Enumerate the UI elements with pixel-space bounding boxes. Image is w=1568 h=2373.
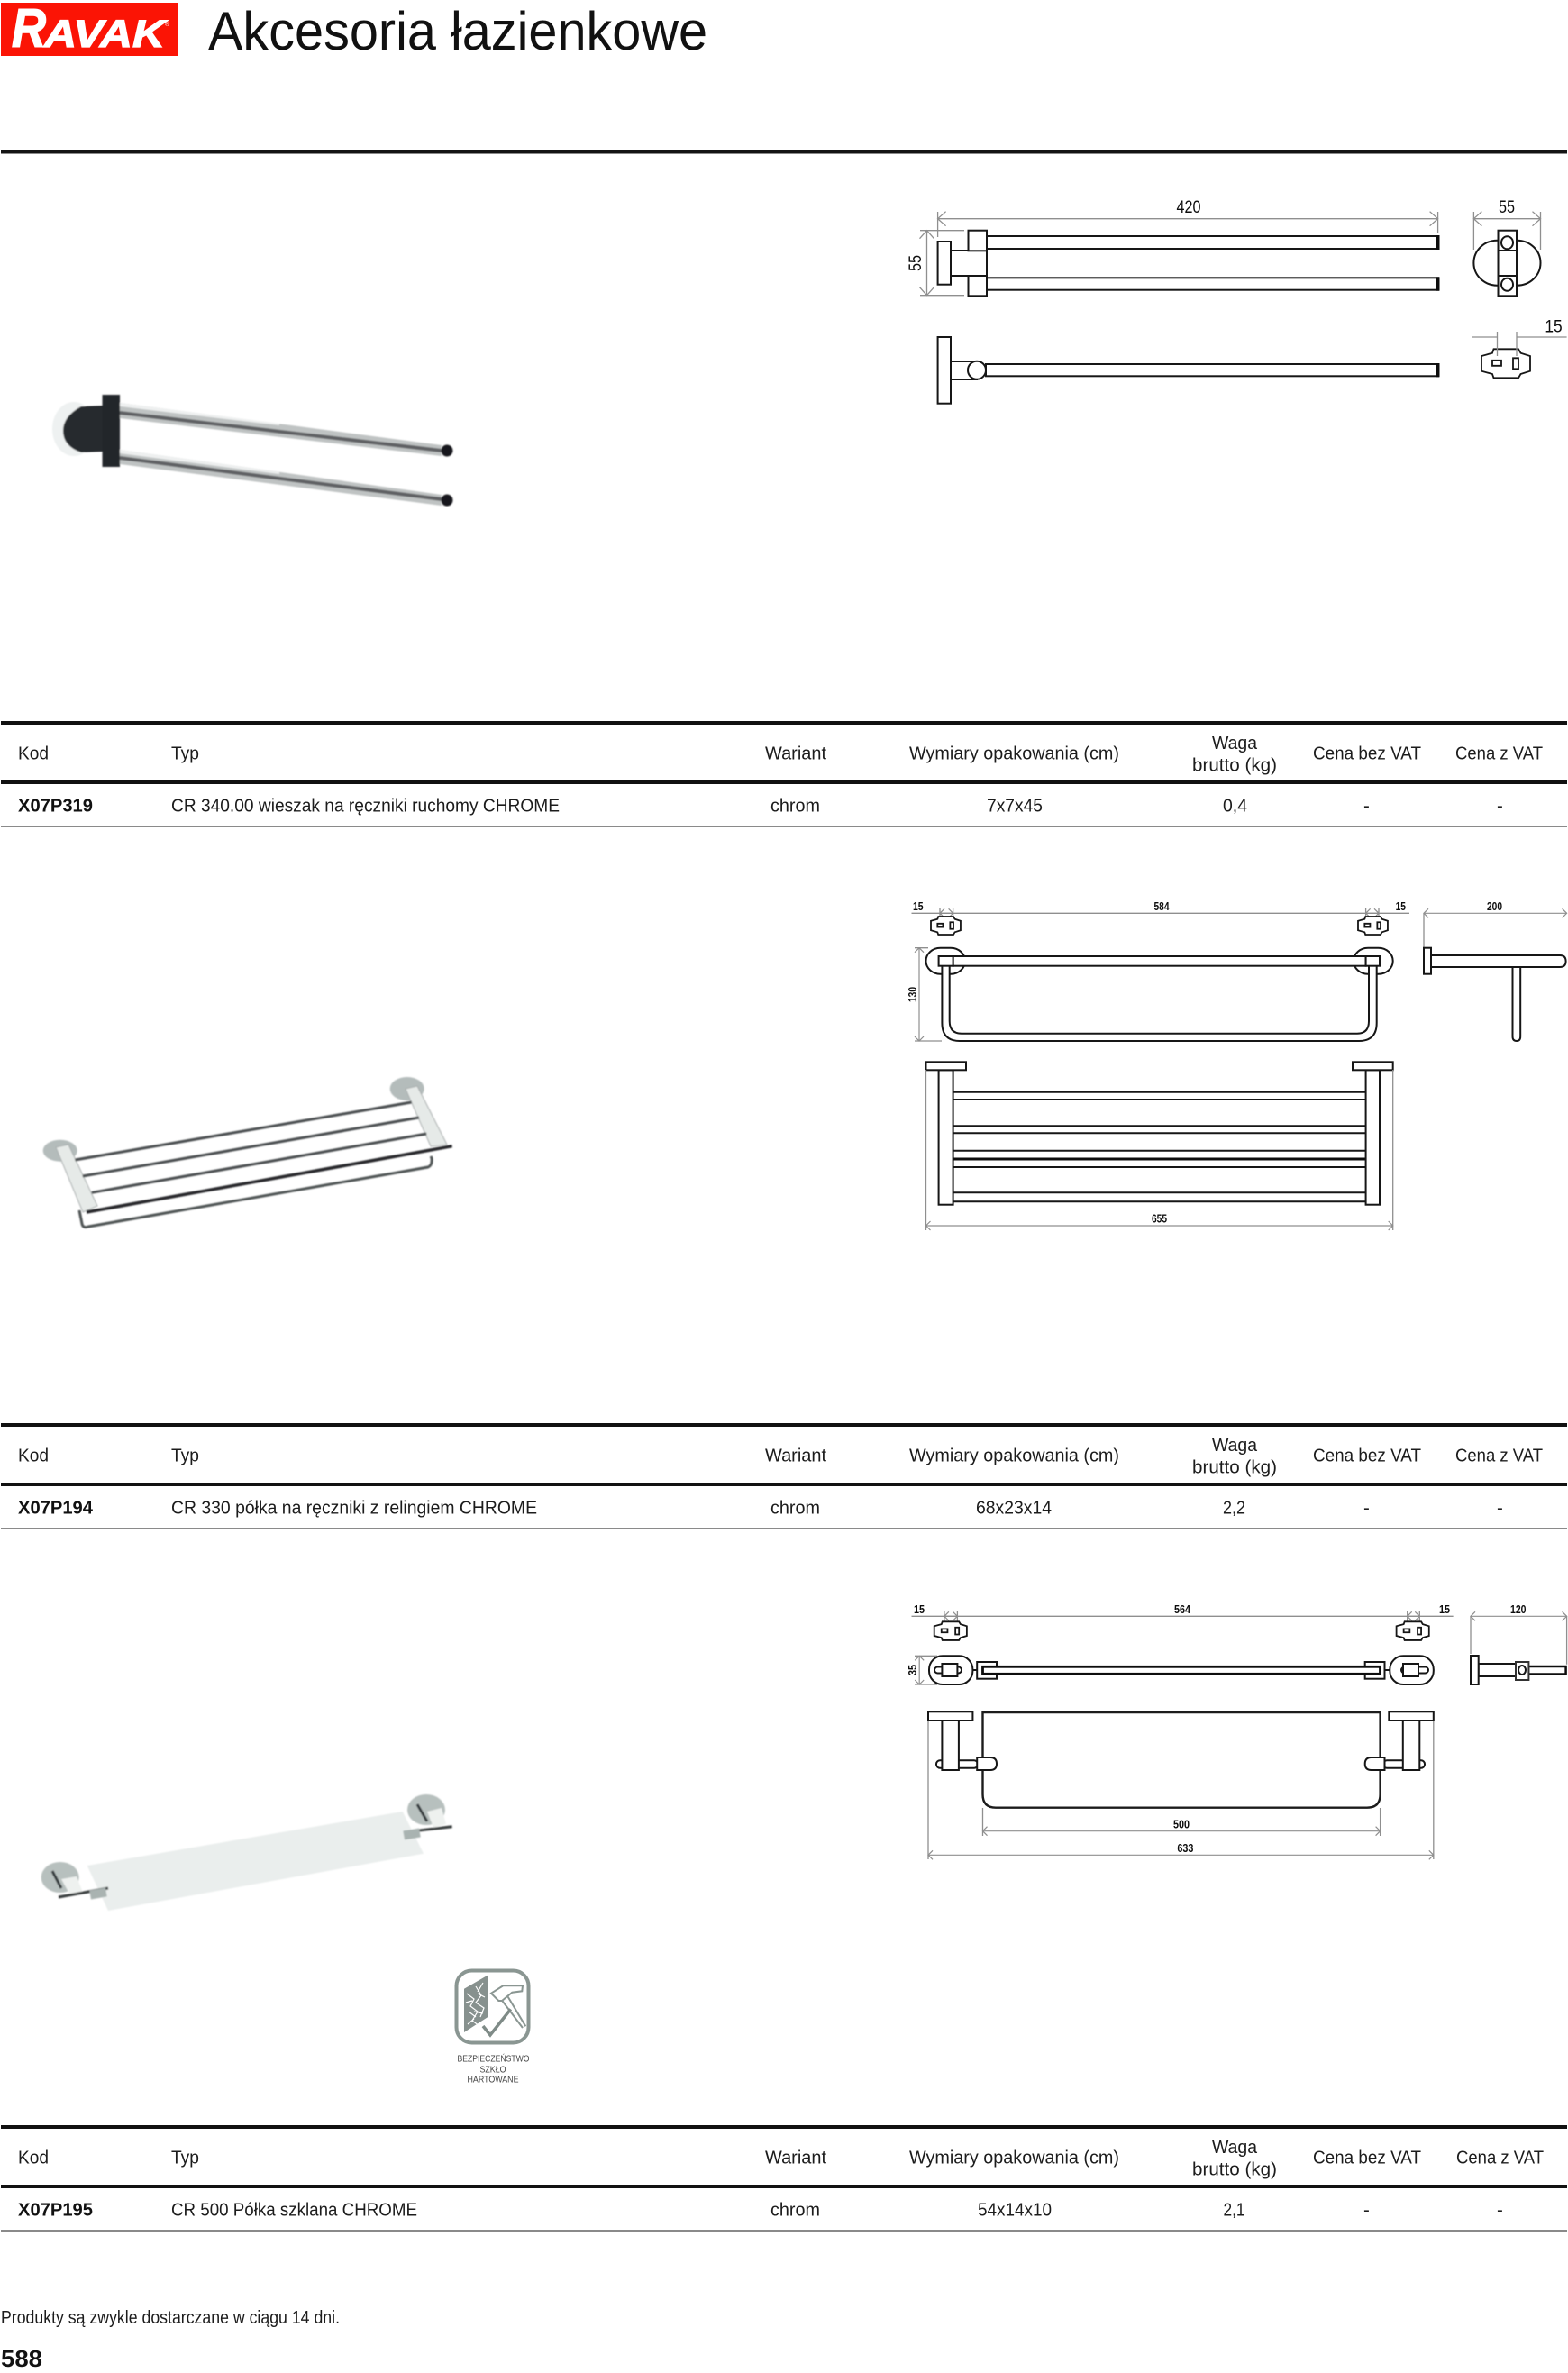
page number: 588 [1,2345,42,2372]
side view shelf [1424,948,1566,1041]
table: X07P195: Cena z VAT [1456,2147,1544,2168]
photo: towel rail X07P319 [52,395,452,507]
title: Akcesoria łazienkowe [208,1,707,61]
dimension: 55 horizontal: 55 [1499,198,1515,217]
footnote: Produkty są zwykle dostarczane w ciągu 14 dni. [1,2307,340,2328]
table: X07P319: Wymiary opakowania (cm) [909,743,1119,764]
table: X07P319: Cena bez VAT [1313,743,1421,764]
dimension: 55 vertical [907,231,964,296]
table: X07P194: Kod [18,1446,49,1465]
dimension: 633 [928,1721,1434,1859]
table: X07P194: X07P194 [18,1498,94,1518]
table: X07P319: CR 340.00 wieszak na ręczniki ruchomy CHROME [171,795,560,817]
table: X07P194: - [1363,1498,1370,1518]
table: X07P319: Cena z VAT [1455,743,1543,764]
table: X07P195: Wariant [765,2147,826,2168]
logo: RAVAK [1,0,178,59]
photo: glass shelf X07P195 [41,1794,452,1911]
table: X07P319: Kod [18,743,49,764]
dimension: 500: 500 [1173,1817,1190,1830]
logo: RAVAK: R [12,0,46,59]
dimension: 55 vertical: 55 [907,255,925,271]
icon part: hammer [491,1985,525,2028]
table: X07P319 [1,721,1567,827]
table: X07P195: X07P195 [18,2199,93,2221]
dimension: 500 [982,1808,1381,1836]
dimension: 35 [906,1656,937,1684]
table: X07P194: Cena bez VAT [1313,1446,1421,1465]
table: X07P195: Wymiary opakowania (cm) [909,2147,1119,2168]
table: X07P319: 0,4 [1223,795,1247,817]
table: X07P194: 2,2 [1223,1498,1245,1518]
dimension: 420: 420 [1177,198,1200,217]
wall plate front [1473,231,1541,296]
table: X07P319: Waga [1212,733,1258,753]
table: X07P195: Typ [171,2147,199,2168]
icon caption: SZKŁO [479,2065,506,2075]
dimension: 130 [906,948,942,1041]
icon part: check mark [483,2009,511,2035]
table: X07P194: - [1497,1498,1503,1518]
table: X07P195: Waga [1212,2137,1258,2158]
wall plates [934,1621,1429,1640]
dimension: 633: 633 [1177,1841,1193,1855]
wall plate with holes [1472,317,1567,378]
icon: tempered safety glass [456,1970,528,2042]
dimension row top: 15 [914,1602,925,1616]
icon caption: HARTOWANE [467,2076,519,2086]
table: X07P195: chrom [770,2199,820,2221]
dimension row top: 15 [1439,1602,1450,1616]
dimension: 655 [926,1070,1393,1230]
dimension row top [912,1602,1454,1624]
header rule [1,150,1567,153]
table: X07P194: CR 330 półka na ręczniki z relingiem CHROME [171,1498,537,1518]
dimension: 130: 130 [906,987,919,1002]
icon caption [458,2054,530,2086]
technical drawing: towel rail [907,198,1567,404]
table: X07P194: brutto (kg) [1192,1456,1277,1478]
table: X07P194: Wariant [765,1446,826,1465]
table: X07P319: X07P319 [18,795,93,817]
dimension: 120 [1471,1602,1567,1665]
top view shelf [926,1062,1393,1205]
table: X07P195: brutto (kg) [1192,2159,1277,2179]
dimension row top [912,899,1409,919]
table: X07P319: - [1497,795,1503,817]
table: X07P319: brutto (kg) [1192,755,1277,775]
table: X07P194 [1,1423,1567,1529]
technical drawing: shelf with rail [906,899,1567,1230]
table: X07P194: Waga [1212,1435,1258,1456]
table: X07P319: - [1363,795,1370,817]
table: X07P195: Cena bez VAT [1313,2147,1421,2168]
dimension row top: 15 [1396,899,1406,913]
table: X07P195: CR 500 Półka szklana CHROME [171,2199,417,2221]
dimension row top: 15 [913,899,924,913]
top view rail [938,231,1440,296]
table: X07P195: - [1363,2199,1370,2221]
dimension row top: 584 [1153,899,1170,913]
table: X07P194: 68x23x14 [976,1498,1052,1518]
dimension: 120: 120 [1510,1602,1527,1616]
dimension: 55 horizontal [1473,198,1541,250]
table: X07P194: chrom [770,1498,820,1518]
top view shelf [929,1656,1434,1684]
logo: RAVAK: ® [165,21,170,28]
table: X07P319: chrom [770,795,820,817]
front view shelf [926,948,1393,1041]
side view shelf [1471,1656,1566,1684]
dimension: 655: 655 [1152,1212,1167,1226]
table: X07P319: Wariant [765,743,826,764]
table: X07P195: 54x14x10 [978,2199,1052,2221]
wall plate with holes: 15 [1545,317,1563,336]
photo: shelf with rail X07P194 [43,1077,452,1228]
table: X07P194: Typ [171,1446,199,1465]
table: X07P195 [1,2125,1567,2232]
table: X07P195: Kod [18,2147,49,2168]
table: X07P194: Wymiary opakowania (cm) [909,1446,1119,1465]
table: X07P319: 7x7x45 [987,795,1043,817]
technical drawing: glass shelf [906,1602,1567,1859]
side view rail [938,337,1440,404]
table: X07P195: 2,1 [1224,2199,1245,2221]
logo: RAVAK: AVAK [43,13,168,56]
dimension: 420 [938,198,1438,237]
dimension: 35: 35 [906,1665,919,1675]
front view shelf [928,1711,1434,1808]
icon caption: BEZPIECZEŃSTWO [458,2054,530,2064]
table: X07P319: Typ [171,743,199,764]
dimension row top: 564 [1174,1602,1191,1616]
wall plates [931,917,1388,935]
dimension: 200: 200 [1487,899,1502,913]
icon part: cracked glass [464,1976,488,2032]
table: X07P194: Cena z VAT [1455,1446,1543,1465]
table: X07P195: - [1497,2199,1503,2221]
